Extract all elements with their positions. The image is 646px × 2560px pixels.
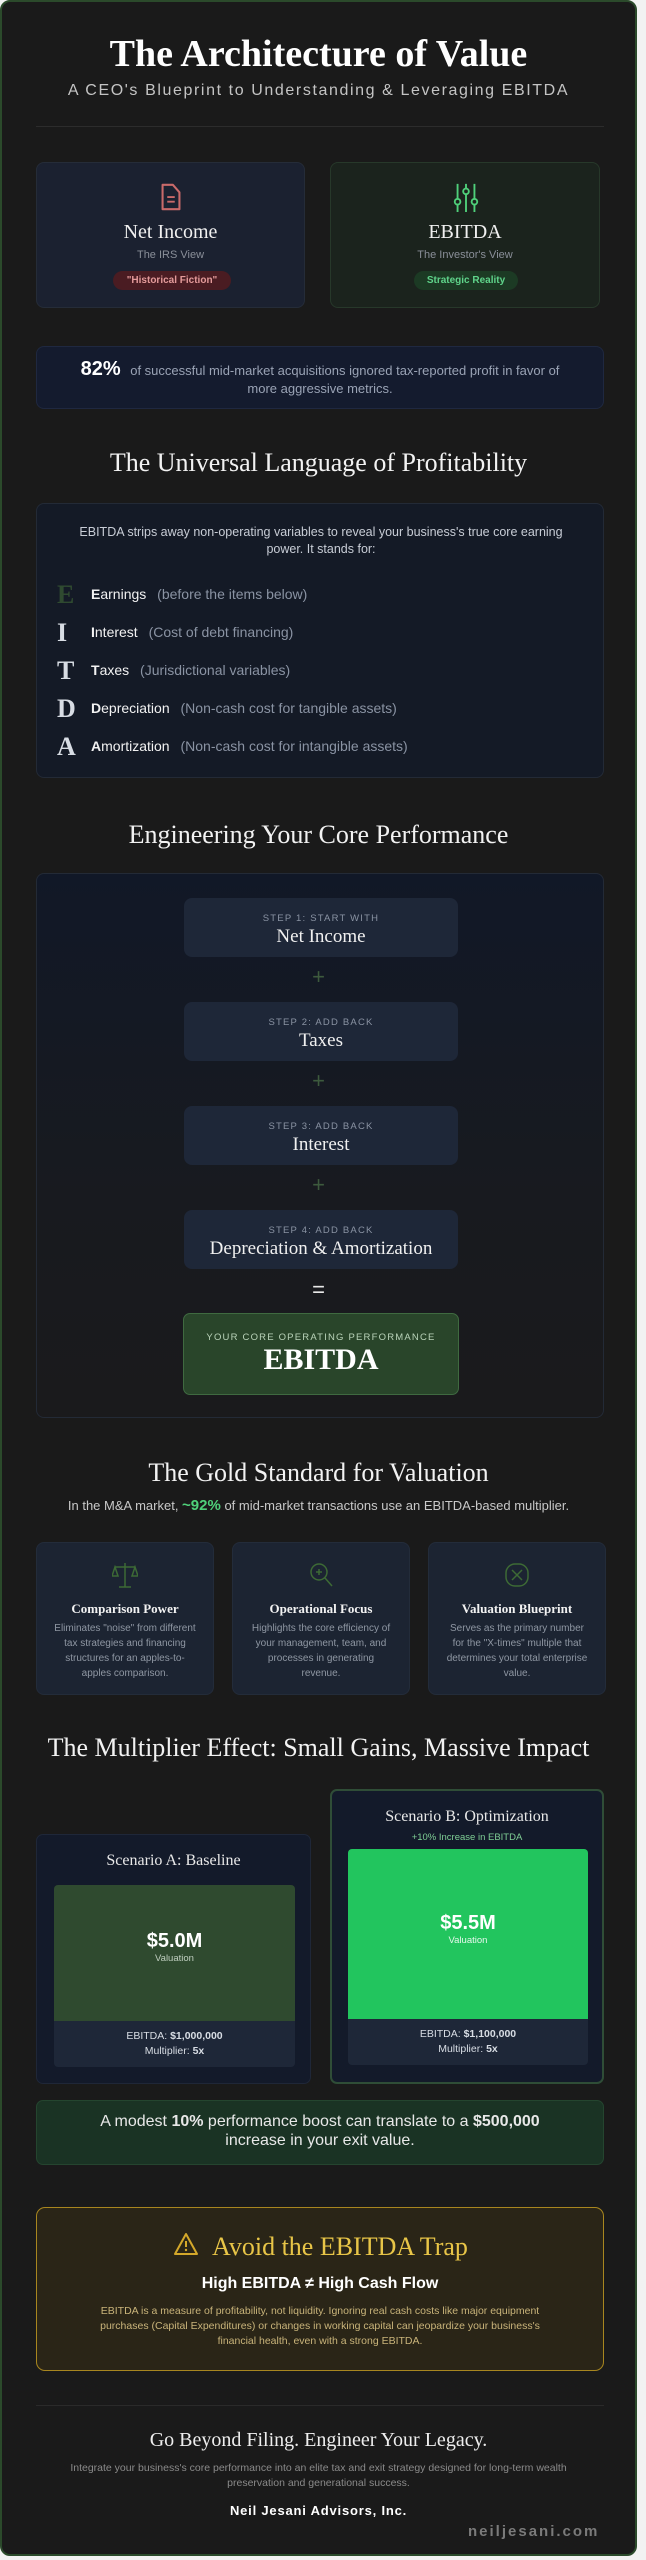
card: comparison power: Comparison Power <box>71 1601 179 1616</box>
panel: EBITDA trap warning <box>36 2207 604 2371</box>
icon: sliders <box>454 184 478 212</box>
subtitle: A CEO's Blueprint to Understanding & Leveraging EBITDA <box>68 82 569 99</box>
panel: EBITDA trap warning: High EBITDA ≠ High Cash Flow <box>202 2275 438 2292</box>
step 3: Interest <box>292 1134 349 1155</box>
row T <box>57 656 290 685</box>
row I: I <box>57 618 67 647</box>
step 2 <box>184 1002 458 1061</box>
panel: EBITDA trap warning: Avoid the EBITDA Trap <box>212 2232 468 2261</box>
card: operational focus: Operational Focus <box>270 1601 372 1616</box>
bar: 5.5M: Valuation <box>449 1935 487 1946</box>
row E <box>57 580 307 609</box>
panel: ebitda: Strategic Reality <box>427 275 505 286</box>
panel: EBITDA trap warning: EBITDA is a measure of profitability, not liquidity. Ignoring real cash costs like major equipment purchases (Capital Expenditures) or changes in working capital can jeopardize your business's financial health, even with a strong EBITDA. <box>100 2305 540 2347</box>
panel: EBITDA acronym <box>36 503 604 778</box>
step 2: Taxes <box>299 1030 343 1051</box>
row D <box>57 694 397 723</box>
callout: 10% boost: increase in your exit value. <box>225 2132 415 2149</box>
panel: net income <box>36 162 305 308</box>
panel: ebitda: The Investor's View <box>417 249 513 261</box>
heading: gold standard: The Gold Standard for Valuation <box>148 1458 489 1487</box>
heading: multiplier effect: The Multiplier Effect: Small Gains, Massive Impact <box>48 1733 589 1762</box>
panel: net income: Net Income <box>124 221 217 243</box>
card: operational focus: Highlights the core efficiency of your management, team, and processes in generating revenue. <box>252 1623 390 1679</box>
result: EBITDA <box>183 1313 459 1395</box>
panel: net income: "Historical Fiction" <box>127 275 217 286</box>
step 4: STEP 4: ADD BACK <box>268 1225 374 1236</box>
acronym rows <box>57 580 408 761</box>
card: comparison power: Eliminates "noise" from different tax strategies and financing structures for an apples-to-apples comparison. <box>54 1623 196 1679</box>
panel: scenario A: Scenario A: Baseline <box>106 1852 241 1869</box>
company name: Neil Jesani Advisors, Inc. <box>230 2503 407 2518</box>
bar: 5.0M: $5.0M <box>147 1930 202 1952</box>
step 3 <box>184 1106 458 1165</box>
step 4: Depreciation & Amortization <box>210 1238 432 1259</box>
panel: scenario B: EBITDA: $1,100,000 <box>420 2028 516 2040</box>
panel: net income: The IRS View <box>137 249 204 261</box>
panel: scenario B <box>330 1789 604 2084</box>
row E: Earnings (before the items below) <box>91 586 307 602</box>
card: operational focus <box>232 1542 410 1695</box>
icon: document <box>162 184 180 210</box>
row A: A <box>57 732 76 761</box>
row D: D <box>57 694 76 723</box>
footer text: Integrate your business's core performance into an elite tax and exit strategy designed for long-term wealth preservation and generational success. <box>70 2462 567 2489</box>
equals: = <box>312 1277 325 1302</box>
callout: 10% boost <box>36 2100 604 2165</box>
stat callout: 82%: 82% of successful mid-market acquisitions ignored tax-reported profit in favor of more aggressive metrics. <box>81 358 559 396</box>
bar: 5.0M <box>54 1885 295 2021</box>
card: valuation blueprint: Valuation Blueprint <box>462 1601 572 1616</box>
heading: universal language: The Universal Language of Profitability <box>110 448 527 477</box>
subtitle: 92%: In the M&A market, ~92% of mid-market transactions use an EBITDA-based multiplier. <box>68 1497 569 1514</box>
panel: scenario A: Multiplier: 5x <box>145 2045 204 2057</box>
row T: Taxes (Jurisdictional variables) <box>91 662 290 678</box>
result: EBITDA: EBITDA <box>263 1343 379 1376</box>
row E: E <box>57 580 74 609</box>
step 1 <box>184 898 458 957</box>
icon: scales <box>112 1563 138 1588</box>
icon: warning <box>174 2233 198 2255</box>
plus: + <box>312 964 325 989</box>
footer heading: Go Beyond Filing. Engineer Your Legacy. <box>150 2429 487 2451</box>
icon: magnifier <box>310 1563 332 1586</box>
stat callout: 82% <box>36 346 604 409</box>
panel: ebitda <box>330 162 600 308</box>
callout: 10% boost: A modest 10% performance boost can translate to a $500,000 <box>100 2113 540 2130</box>
bar: 5.0M: Valuation <box>155 1953 194 1964</box>
heading: engineering: Engineering Your Core Performance <box>129 820 508 849</box>
panel: scenario A: EBITDA: $1,000,000 <box>126 2030 223 2042</box>
bar: 5.5M <box>348 1849 588 2019</box>
row D: Depreciation (Non-cash cost for tangible assets) <box>91 700 397 716</box>
row T: T <box>57 656 74 685</box>
row A <box>57 732 408 761</box>
panel: scenario B: Scenario B: Optimization <box>385 1808 549 1825</box>
card: valuation blueprint: Serves as the primary number for the "X-times" multiple that determines your total enterprise value. <box>447 1623 587 1679</box>
step 1: Net Income <box>276 926 366 947</box>
plus: + <box>312 1172 325 1197</box>
row A: Amortization (Non-cash cost for intangible assets) <box>91 738 408 754</box>
row I <box>57 618 293 647</box>
panel: scenario B: Multiplier: 5x <box>438 2043 498 2055</box>
intro text: EBITDA strips away non-operating variables to reveal your business's true core earning power. It stands for: <box>79 525 563 556</box>
step 1: STEP 1: START WITH <box>263 913 379 924</box>
title: The Architecture of Value <box>110 33 527 75</box>
bar: 5.5M: $5.5M <box>440 1912 496 1934</box>
card: comparison power <box>36 1542 214 1695</box>
panel: scenario A <box>36 1834 311 2084</box>
panel: ebitda: EBITDA <box>428 221 502 243</box>
result: EBITDA: YOUR CORE OPERATING PERFORMANCE <box>206 1332 436 1343</box>
panel: formula <box>36 873 604 1418</box>
step 4 <box>184 1210 458 1269</box>
icon: multiplier <box>505 1563 529 1587</box>
step 2: STEP 2: ADD BACK <box>268 1017 374 1028</box>
step 3: STEP 3: ADD BACK <box>268 1121 374 1132</box>
website: neiljesani.com <box>468 2523 599 2540</box>
card: valuation blueprint <box>428 1542 606 1695</box>
plus: + <box>312 1068 325 1093</box>
panel: scenario B: +10% Increase in EBITDA <box>412 1832 522 1843</box>
row I: Interest (Cost of debt financing) <box>91 624 293 640</box>
